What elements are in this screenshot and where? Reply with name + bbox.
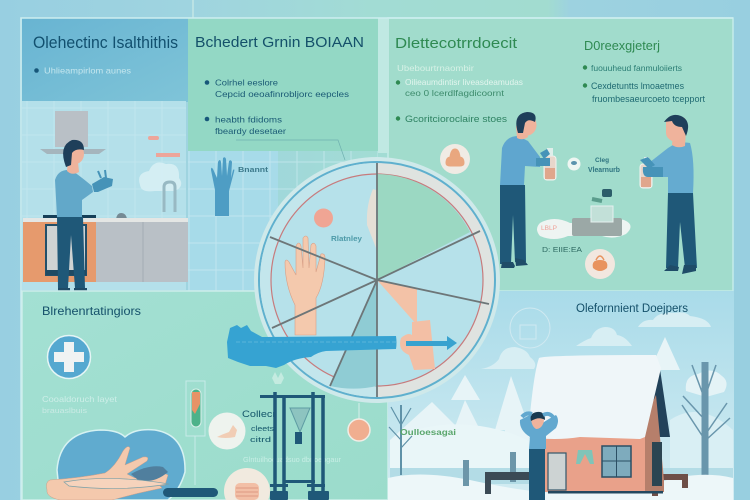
text block: disinfect right [583, 63, 705, 104]
text block: disinfect left: ceo 0 lcerdlfagdicoornt [405, 88, 505, 98]
small label: vitamin [568, 157, 620, 174]
heading: top middle: Bchedert Grnin BOIAAN [195, 34, 364, 51]
snowy mountains [390, 337, 680, 460]
icon: filter stand [260, 372, 329, 500]
house [528, 355, 670, 494]
panel: top middle heading [188, 18, 378, 160]
arrow: blue brush stroke [227, 325, 396, 368]
icon: product bottle and cleaning bar: LBLP [541, 225, 557, 232]
steam cloud [139, 163, 181, 191]
panel: bottom right winter scene [388, 291, 734, 500]
text block: bottom left caption [42, 394, 118, 415]
icon: sliced badge [224, 468, 270, 500]
chart: central wheel [227, 157, 500, 403]
arrow: pointing right [406, 336, 457, 350]
heading: top left: Olehectinc Isalthithis [33, 34, 178, 52]
text block: disinfect left: Oilieaumdintisr liveasdeamudas [405, 77, 523, 87]
icon: faint lock outline [510, 308, 550, 348]
icon: medical cross [48, 336, 90, 378]
illustration: hand in blue heart [46, 430, 218, 500]
text block: disinfect right: fuouuheud fanmuloiierts [591, 63, 682, 73]
text block: disinfect right: fruombesaeurcoeto tcepport [592, 94, 705, 104]
icon: bandaged wrist [400, 320, 435, 370]
panel: kitchen scene [22, 101, 193, 291]
label: collect: Glntuilhocuadsuo dbnoeogaur [243, 455, 341, 464]
heading: disinfect left: Dlettecotrrdoecit [395, 35, 518, 52]
fences [485, 472, 535, 494]
label: collect [242, 409, 341, 464]
icon: red dot [314, 208, 333, 228]
person: hands on head [520, 412, 558, 500]
icon: hand badge [208, 412, 246, 450]
icon: medical badge [585, 249, 615, 279]
wheel segment: green [377, 174, 470, 280]
panel: top middle heading: Cepcid oeoafinrobljorc eepcles [215, 89, 349, 99]
icon: bandage badge [440, 144, 470, 174]
icon: test tube [186, 381, 205, 436]
bullet text: top left: Uhlieampirlom aunes [44, 66, 131, 76]
person: left holding spray bottle [500, 112, 556, 268]
panel: top right green section [378, 18, 733, 291]
wheel segment: peach wedge [377, 280, 417, 325]
text block: bullets one: Colrhel eeslore [215, 78, 278, 88]
small label: vitamin: Vlearnurb [588, 167, 620, 174]
panel: tiled wall with glove [188, 151, 378, 291]
wheel spokes [270, 163, 489, 397]
clouds [638, 312, 711, 327]
panel: top left heading [22, 18, 188, 102]
text block: disinfect left: Gcoritcioroclaire stoes [405, 114, 508, 124]
label: lower caption: D: EIIE:EA [542, 247, 582, 254]
icon: product bottle and cleaning bar [537, 189, 631, 239]
text block: bullets two: heabth fdidoms [215, 114, 282, 124]
person: kitchen with gloves [55, 140, 113, 291]
label: wheel: Rlatnley [331, 234, 363, 243]
heading: bottom left: Blrehenrtatingiors [42, 304, 141, 318]
heading: winter scene: Olefornnient Doejpers [576, 303, 688, 315]
small label: vitamin: Cleg [595, 157, 609, 164]
heading: disinfect right: D0reexgjeterj [584, 38, 660, 53]
panel: bottom left green section [22, 291, 388, 500]
icon: raised hand [285, 236, 325, 335]
text block: disinfect left: Ubebourtrnaombir [397, 63, 474, 73]
text block: bottom left caption: brauaslbuis [42, 408, 88, 415]
text block: disinfect right: Cexdetuntts lmoaetmes [591, 81, 684, 91]
icon: glove [211, 157, 234, 216]
text block: bottom left caption: Cooaldoruch Iayet [42, 394, 118, 404]
label: glove: Bnannt [238, 165, 269, 174]
label: collect: Collecr [242, 409, 276, 420]
text block: disinfect left [396, 63, 523, 124]
tree: left [389, 405, 412, 475]
counter [23, 218, 193, 222]
label: collect: citrd [250, 435, 271, 444]
tree: right [682, 362, 730, 475]
person: right holding spray bottle [640, 115, 697, 274]
icon: small badge [348, 403, 370, 441]
label: collect: cleets [251, 424, 274, 433]
snow ground [388, 474, 733, 500]
panel: top middle heading: fbeardy desetaer [215, 126, 286, 136]
label: outside: Oulloesagai [400, 427, 456, 437]
wheel ring: left half [260, 163, 377, 397]
